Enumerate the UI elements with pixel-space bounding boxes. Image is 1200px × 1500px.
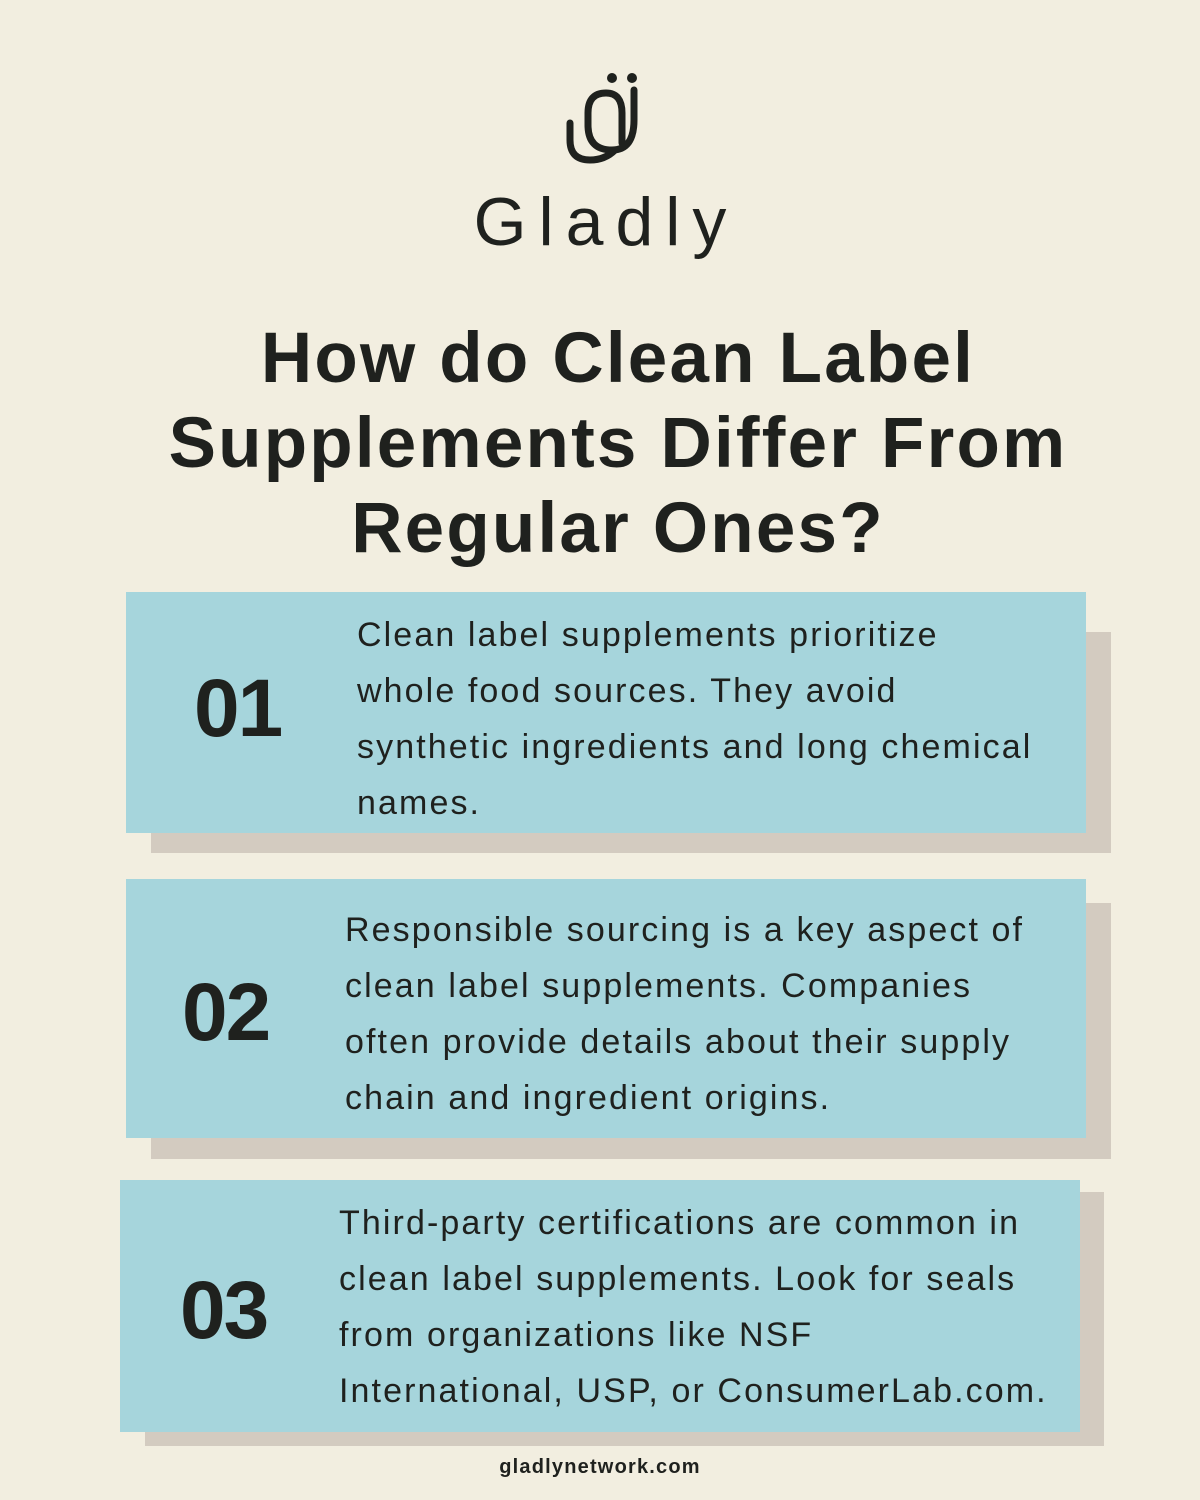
text 2: often provide details about their supply bbox=[345, 1023, 1011, 1061]
text 1: synthetic ingredients and long chemical bbox=[357, 728, 1032, 766]
title: Supplements Differ From bbox=[169, 404, 1067, 483]
text 3: from organizations like NSF bbox=[339, 1316, 813, 1354]
text 1: whole food sources. They avoid bbox=[357, 672, 898, 710]
text 1: names. bbox=[357, 784, 481, 822]
text 2: clean label supplements. Companies bbox=[345, 967, 972, 1005]
text 1: Clean label supplements prioritize bbox=[357, 616, 939, 654]
text 1 bbox=[357, 616, 1032, 822]
text 3: International, USP, or ConsumerLab.com. bbox=[339, 1372, 1048, 1410]
number 03: 03 bbox=[180, 1265, 267, 1356]
text 3: Third-party certifications are common in bbox=[339, 1204, 1020, 1242]
footer url: gladlynetwork.com bbox=[499, 1456, 701, 1478]
title bbox=[169, 319, 1067, 568]
title: How do Clean Label bbox=[261, 319, 975, 398]
number 01: 01 bbox=[194, 663, 281, 754]
panel 1 bbox=[126, 592, 1111, 853]
text 2: Responsible sourcing is a key aspect of bbox=[345, 911, 1024, 949]
logo icon bbox=[566, 73, 638, 164]
text 2 bbox=[345, 911, 1024, 1117]
text 3: clean label supplements. Look for seals bbox=[339, 1260, 1016, 1298]
number 02: 02 bbox=[182, 967, 269, 1058]
brand name: Gladly bbox=[474, 184, 738, 260]
panel 2 bbox=[126, 879, 1111, 1159]
text 2: chain and ingredient origins. bbox=[345, 1079, 831, 1117]
text 3 bbox=[339, 1204, 1048, 1410]
panel 3 bbox=[120, 1180, 1104, 1446]
title: Regular Ones? bbox=[351, 489, 885, 568]
